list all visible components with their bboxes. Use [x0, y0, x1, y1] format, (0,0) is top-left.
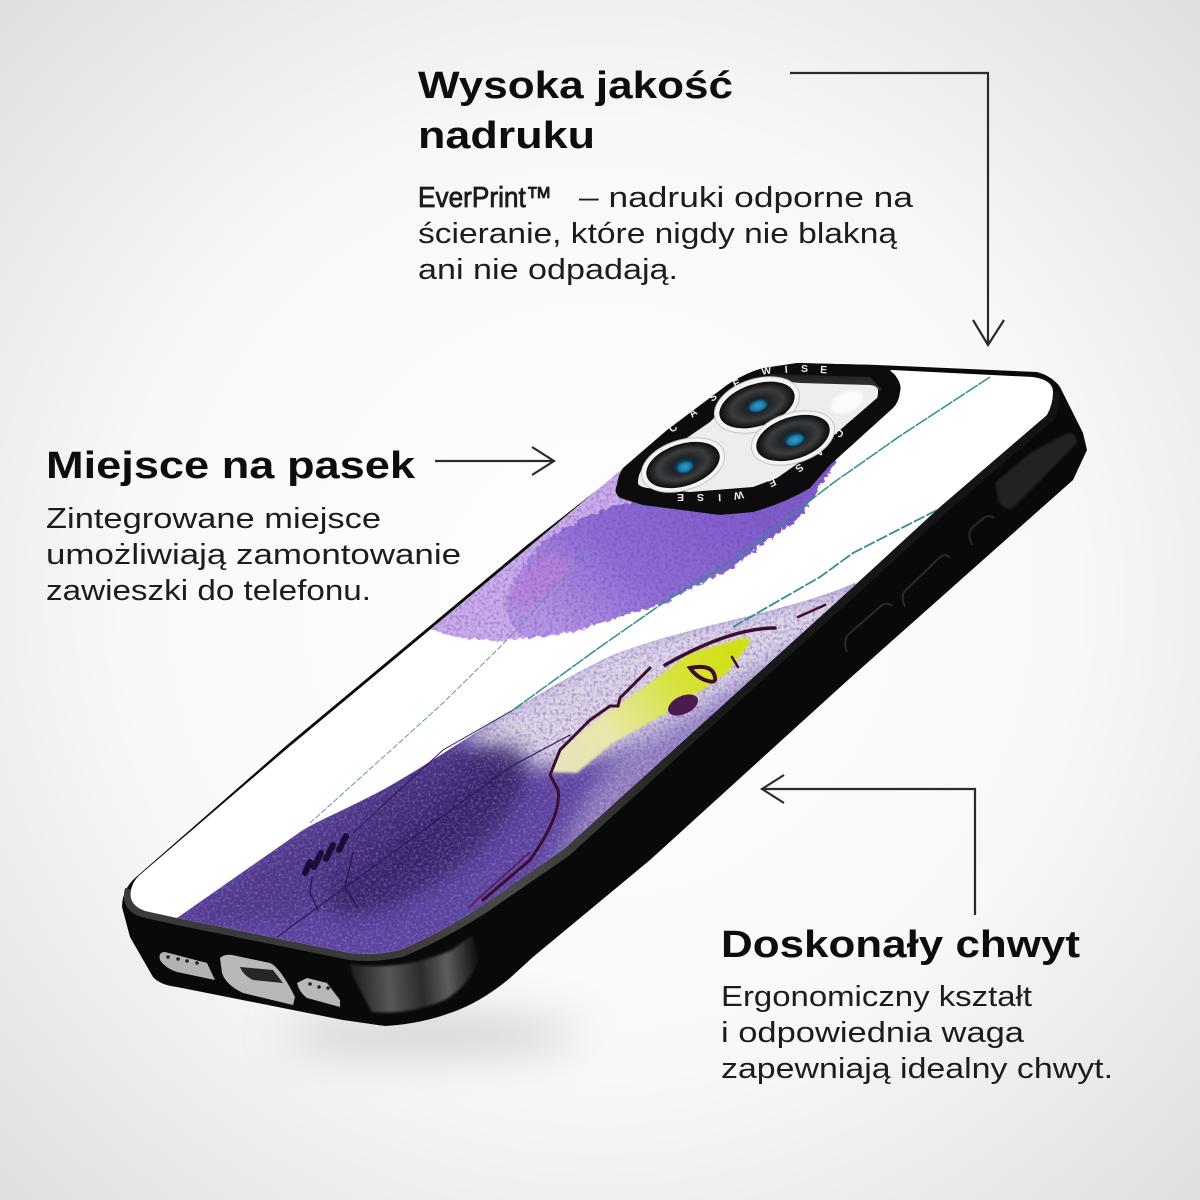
main violet wash	[505, 455, 838, 638]
lens top	[707, 367, 807, 443]
lens center top	[747, 397, 769, 415]
lens center right	[784, 431, 806, 449]
arrow: to side grip	[762, 775, 975, 915]
hem line one	[353, 710, 513, 833]
stitched thread lines	[277, 377, 990, 937]
teal thread A	[513, 377, 990, 710]
heading: print quality	[418, 65, 733, 157]
camera window	[638, 380, 878, 492]
case body	[122, 363, 1087, 1026]
body text: print quality: ścieranie, które nigdy nie blakną	[418, 218, 898, 250]
dark shadow	[318, 729, 542, 926]
lens glass right	[750, 406, 836, 470]
body text: grip	[721, 981, 1113, 1085]
speaker holes right	[310, 984, 328, 988]
phone case mockup	[100, 350, 1100, 1026]
phone drop shadow	[280, 1017, 580, 1053]
dark left veil	[180, 750, 480, 925]
volume button lower	[845, 604, 892, 652]
arrow: to case back	[790, 73, 1004, 345]
hem line two	[277, 735, 570, 937]
USB port surround	[220, 955, 295, 1005]
body text: strap slot: umożliwiają zamontowanie	[46, 539, 461, 571]
camera bump	[616, 363, 901, 515]
body text: strap slot	[46, 503, 461, 607]
heading: print quality: Wysoka jakość	[418, 65, 733, 107]
magenta overlap	[508, 553, 575, 608]
pale top band	[460, 575, 870, 770]
eye mark	[732, 657, 738, 667]
body text: print quality	[418, 182, 914, 286]
lens center left	[675, 459, 695, 475]
upper wash grain	[431, 462, 835, 640]
callout: strap slot	[46, 445, 554, 607]
wash base	[177, 583, 856, 954]
speaker holes left	[168, 957, 197, 963]
bump lettering top: CASEWISE	[667, 363, 827, 435]
lens right	[744, 401, 842, 475]
light lilac wash	[420, 455, 838, 640]
lens ring right	[744, 401, 842, 475]
inner camera wall	[770, 374, 882, 392]
bottom speaker right	[297, 978, 340, 1007]
violet right side	[540, 646, 788, 866]
action switch recess	[995, 433, 1077, 509]
side buttons	[845, 516, 994, 652]
dark grain layer	[178, 583, 856, 954]
case rim	[128, 392, 1056, 957]
bump outer ring	[616, 363, 901, 515]
heading: strap slot: Miejsce na pasek	[46, 445, 416, 487]
body text: print quality: – nadruki odporne na	[579, 182, 914, 214]
flash	[827, 386, 867, 418]
bottom speaker left	[160, 952, 215, 980]
heading: print quality: nadruku	[418, 115, 595, 157]
callout: grip	[721, 775, 1113, 1085]
lens left	[634, 428, 732, 502]
lens ring left	[634, 428, 732, 502]
stripes	[305, 836, 346, 873]
body text: strap slot: Zintegrowane miejsce	[46, 503, 381, 535]
lens glass left	[640, 433, 726, 497]
body text: grip: Ergonomiczny kształt	[721, 981, 1032, 1013]
body text: print quality: EverPrint™	[418, 182, 552, 214]
upper purple wash	[420, 455, 838, 640]
face drawing	[305, 605, 825, 910]
brow stroke	[665, 628, 775, 665]
body text: strap slot: zawieszki do telefonu.	[46, 575, 371, 607]
small dash	[798, 605, 825, 617]
grain layer	[431, 462, 835, 640]
legs	[310, 853, 358, 910]
lower watercolor wash	[177, 583, 856, 954]
mouth dot	[668, 694, 698, 716]
lens glass top	[713, 373, 801, 437]
teal thread B	[733, 510, 937, 627]
heading: grip: Doskonały chwyt	[721, 924, 1080, 966]
arrow: to strap slot	[435, 447, 554, 475]
body text: grip: zapewniają idealny chwyt.	[721, 1053, 1113, 1085]
white back panel	[130, 370, 1053, 954]
faint thread C	[310, 550, 587, 823]
USB port opening	[240, 967, 283, 983]
screen back print	[130, 370, 1053, 954]
light grain layer	[178, 584, 854, 954]
yellow patch	[550, 637, 750, 773]
volume button upper	[903, 555, 950, 607]
callout: print quality	[418, 65, 1004, 345]
profile stroke	[483, 668, 650, 900]
lens ring top	[707, 367, 807, 443]
body text: print quality: ani nie odpadają.	[418, 254, 678, 286]
bump lettering bottom: CASEWISE	[677, 426, 846, 503]
D shaped eye	[690, 667, 715, 682]
body text: grip: i odpowiednia waga	[721, 1017, 1025, 1049]
glossy corner highlight	[350, 935, 480, 1012]
reddish line	[468, 852, 530, 908]
small side button	[969, 516, 994, 545]
